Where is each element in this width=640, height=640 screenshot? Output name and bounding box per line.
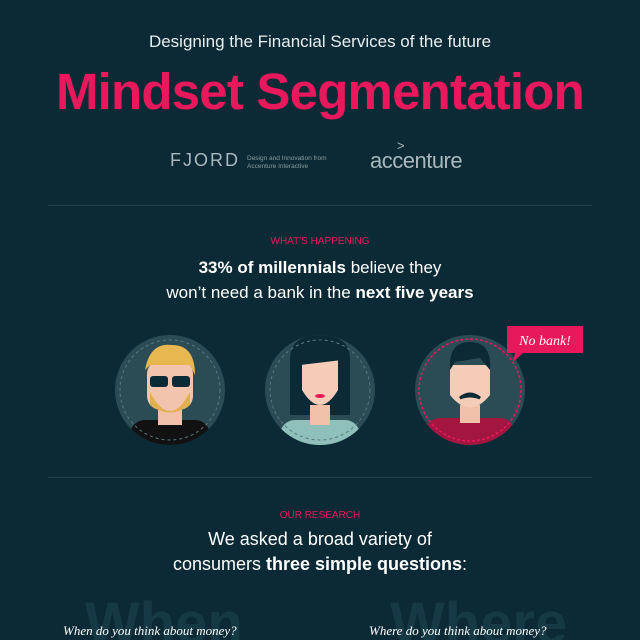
persona: man with moustache xyxy=(415,335,525,450)
persona: blond man xyxy=(115,335,225,450)
research text: We asked a broad variety of xyxy=(208,529,432,549)
callout: no bank: No bank! xyxy=(518,334,571,349)
persona: woman xyxy=(265,335,375,450)
subtitle: Designing the Financial Services of the future xyxy=(149,32,491,51)
personas xyxy=(115,326,583,445)
logos: Design and Innovation from xyxy=(247,155,326,162)
headline statistic xyxy=(166,258,474,302)
headline statistic: won’t need a bank in the next five years xyxy=(166,283,474,302)
logos xyxy=(170,138,462,173)
question: when: When do you think about money? xyxy=(63,623,237,638)
logos: Accenture Interactive xyxy=(247,163,308,170)
research text: consumers three simple questions: xyxy=(173,554,467,574)
headline statistic: 33% of millennials believe they xyxy=(199,258,441,277)
logo: accenture: accenture xyxy=(370,148,462,173)
title: Mindset Segmentation xyxy=(56,63,584,120)
logo: fjord: FJORD xyxy=(170,150,240,170)
section label: our research: OUR RESEARCH xyxy=(280,510,360,521)
section label: what's happening: WHAT'S HAPPENING xyxy=(271,236,369,247)
logos: > xyxy=(397,138,405,153)
callout: no bank xyxy=(507,326,583,362)
question: where: Where do you think about money? xyxy=(369,623,546,638)
research text xyxy=(173,529,467,574)
